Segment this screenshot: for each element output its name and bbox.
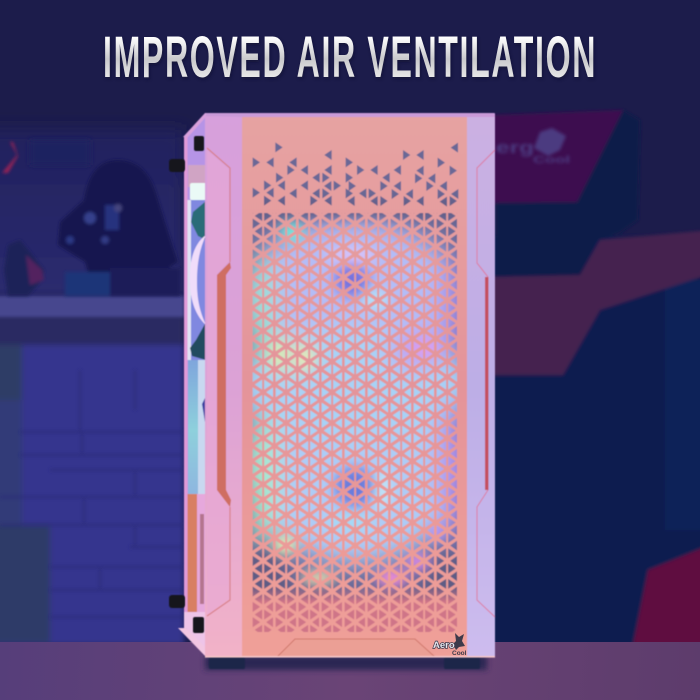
brand logo: Cool	[452, 650, 467, 657]
fan: dark teal blade bottom	[190, 322, 206, 360]
side: frame edge	[184, 137, 188, 627]
side: orange bracket	[187, 494, 197, 616]
perforations: dark grey corners	[252, 198, 457, 594]
case: thumbscrews	[169, 136, 204, 633]
fan: glowing ring	[190, 235, 206, 325]
background: blurred chair logo: erg	[496, 138, 534, 157]
fan: dark teal blade top	[191, 201, 206, 240]
right strip: panel outline	[477, 150, 495, 617]
bottom trapezoid badge	[277, 639, 435, 657]
case: top edge	[206, 113, 495, 117]
case feet	[209, 657, 480, 669]
left strip: raised panel	[207, 150, 229, 615]
background: blurred chair logo	[496, 128, 570, 166]
background: gaming chair	[490, 110, 700, 656]
right strip: red channel	[485, 277, 488, 490]
brand logo: Aero	[433, 640, 455, 651]
left strip: recessed channel	[217, 262, 231, 507]
table top	[0, 642, 700, 700]
logo: leaf mark	[453, 633, 465, 650]
brand logo	[433, 633, 467, 657]
background: red chevron	[2, 142, 18, 173]
case: perforated pink front panel	[235, 117, 478, 657]
case: bottom edge	[205, 656, 495, 658]
background: wall shelf	[0, 296, 184, 317]
case shadow on table	[205, 655, 487, 670]
fan: white bracket	[190, 183, 206, 200]
side: pale blue lower bay	[188, 360, 198, 495]
case: right front strip	[467, 113, 495, 657]
background: small toy figure	[4, 240, 44, 296]
case: open side interior	[178, 113, 206, 657]
case body	[178, 113, 495, 658]
left strip: raised panel outline	[207, 148, 230, 616]
background: blurred chair logo: Cool	[533, 155, 570, 166]
case: left front strip	[205, 113, 243, 657]
perforations: RGB fan light through triangular holes	[252, 142, 459, 632]
background: brick wall	[0, 370, 184, 617]
background: helmet figure	[58, 160, 180, 296]
